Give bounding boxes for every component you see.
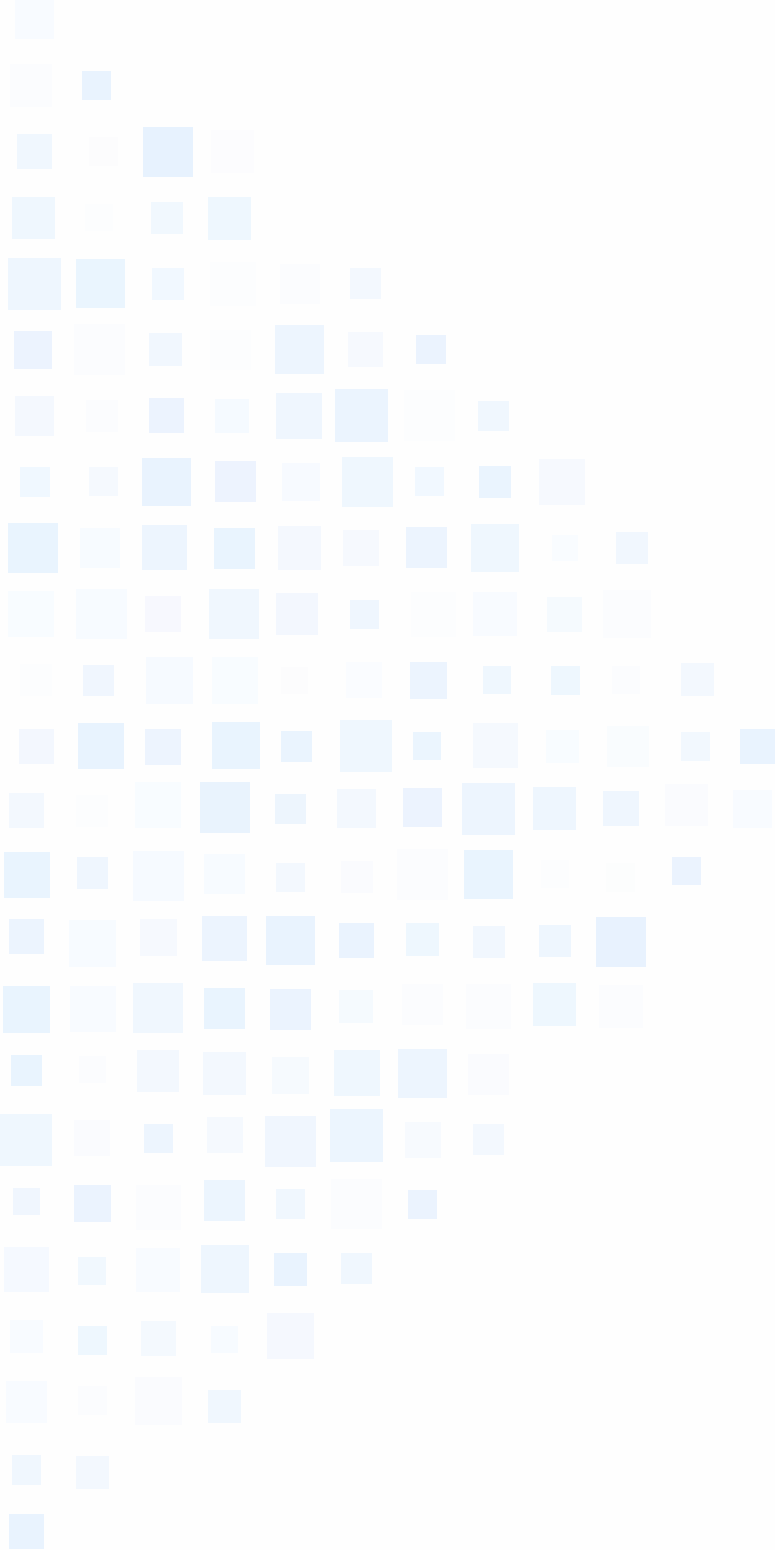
row 5 squares <box>8 258 381 310</box>
row 14 squares <box>4 849 701 901</box>
row 8 squares <box>20 457 585 507</box>
row 10 squares <box>8 589 651 639</box>
row 4 squares <box>12 197 251 240</box>
row 9 squares <box>8 523 648 573</box>
row 2 squares <box>10 64 111 107</box>
row 20 squares <box>4 1245 372 1293</box>
row 24 squares <box>9 1514 44 1549</box>
row 3 squares <box>17 127 254 177</box>
row 16 squares <box>3 983 643 1033</box>
row 12 squares <box>19 720 775 772</box>
row 6 squares <box>14 324 446 375</box>
row 18 squares <box>0 1109 504 1167</box>
row 13 squares <box>9 782 772 835</box>
row 15 squares <box>9 916 646 967</box>
row 7 squares <box>15 389 509 442</box>
row 23 squares <box>12 1455 109 1489</box>
row 11 squares <box>20 657 714 704</box>
row 17 squares <box>11 1049 509 1098</box>
row 1 squares <box>15 0 54 39</box>
row 19 squares <box>13 1179 437 1230</box>
row 21 squares <box>10 1313 314 1359</box>
row 22 squares <box>6 1377 241 1425</box>
